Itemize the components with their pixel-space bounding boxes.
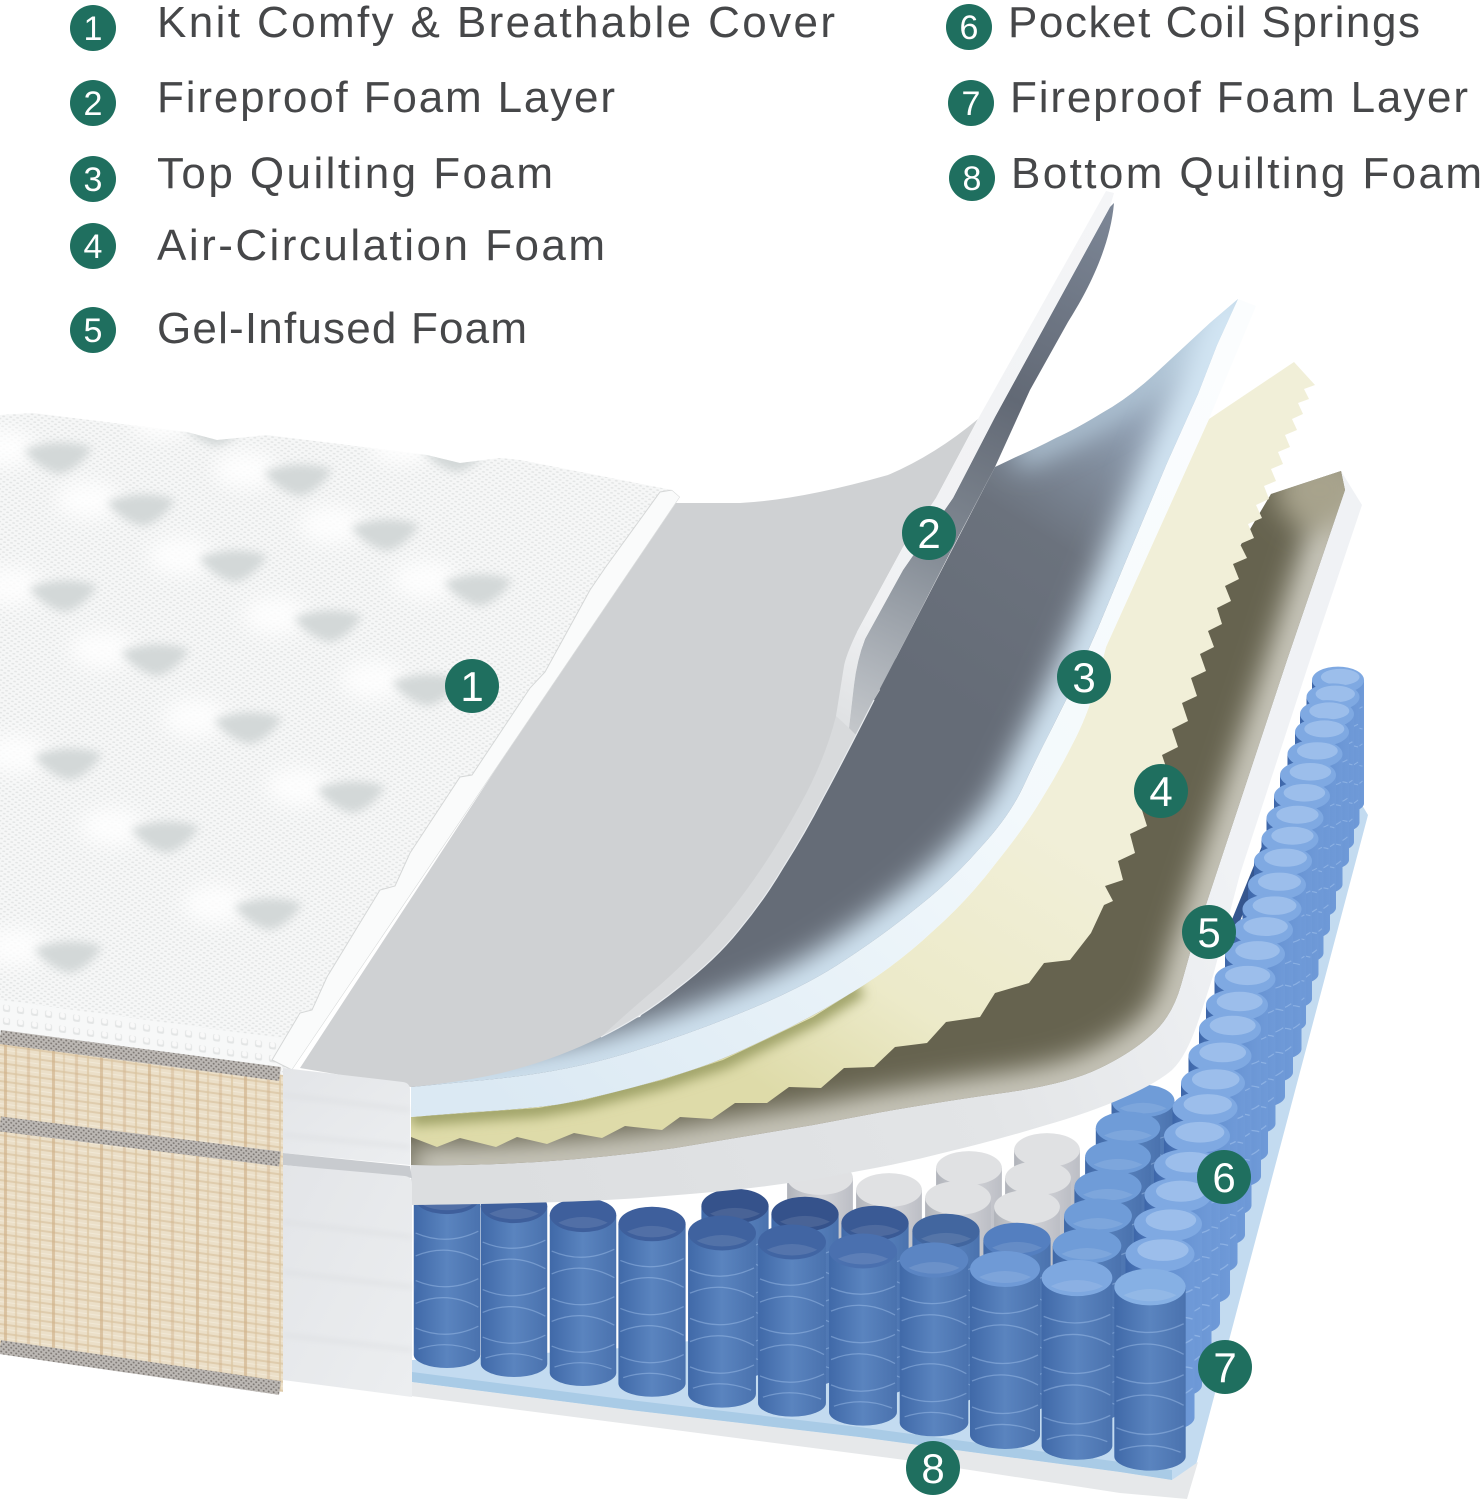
- quilted front edge: [0, 1001, 284, 1066]
- legend 5: 5: [84, 312, 102, 350]
- diagram marker 4: [1134, 764, 1188, 818]
- panel: knit comfy cover top: [0, 401, 680, 1080]
- legend 6: 6: [960, 9, 978, 47]
- legend 2: Fireproof Foam Layer: [157, 73, 615, 122]
- legend 8: Bottom Quilting Foam: [1011, 149, 1482, 198]
- legend 1: 1: [84, 10, 102, 48]
- cover edge strip: [272, 490, 680, 1070]
- diagram marker 6: 6: [1212, 1154, 1236, 1201]
- heading list: left column: [70, 0, 835, 353]
- diagram marker 3: 3: [1072, 654, 1096, 701]
- legend 7: Fireproof Foam Layer: [1010, 73, 1468, 122]
- white centre coils: [787, 1133, 1080, 1376]
- diagram marker 8: [906, 1441, 960, 1495]
- panel: pocket coil springs: [414, 667, 1364, 1471]
- diagram marker 4: 4: [1149, 768, 1173, 815]
- diagram marker 1: [445, 659, 499, 713]
- diagram marker 2: [902, 506, 956, 560]
- panel: bottom quilting foam plate: [411, 800, 1368, 1499]
- panel: top quilting foam layer 3: [411, 299, 1256, 1117]
- diagram marker 6: [1197, 1150, 1251, 1204]
- diagram marker 7: 7: [1213, 1344, 1237, 1391]
- front coil row: [414, 1180, 1186, 1471]
- diagram marker 3: [1057, 650, 1111, 704]
- second coil column: [1053, 1085, 1174, 1422]
- right coil column: [1125, 667, 1364, 1431]
- heading list: right column: [946, 0, 1482, 201]
- diagram marker 8: 8: [921, 1445, 945, 1492]
- diagram marker 1: 1: [460, 663, 484, 710]
- diagram marker 5: 5: [1197, 909, 1221, 956]
- legend 2: 2: [84, 85, 102, 123]
- second coil row: [701, 1189, 1051, 1413]
- panel: fireproof foam layer 2: [300, 191, 1114, 1087]
- cover tufts: [0, 401, 512, 973]
- panel: mattress side fabric: [0, 1035, 283, 1392]
- legend 8: 8: [963, 160, 981, 198]
- panel: side foam block: [283, 1068, 412, 1397]
- diagram marker 7: [1198, 1340, 1252, 1394]
- diagram marker 2: 2: [917, 510, 941, 557]
- legend 4: Air-Circulation Foam: [157, 221, 605, 270]
- legend 3: Top Quilting Foam: [157, 149, 553, 198]
- legend 3: 3: [84, 161, 102, 199]
- legend 7: 7: [962, 85, 980, 123]
- diagram marker 5: [1182, 905, 1236, 959]
- panel: air-circulation foam layer 4: [411, 362, 1315, 1147]
- legend 4: 4: [84, 228, 102, 266]
- legend 5: Gel-Infused Foam: [157, 304, 527, 353]
- panel: gel-infused foam layer 5: [411, 450, 1365, 1205]
